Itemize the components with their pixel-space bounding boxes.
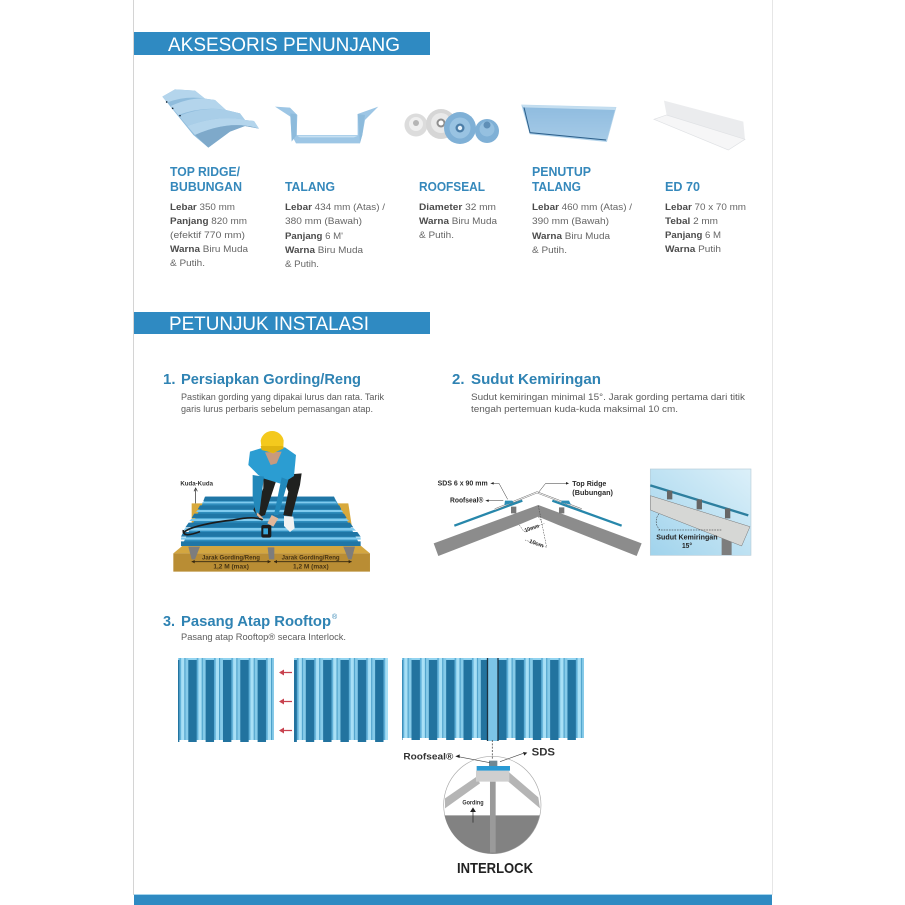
- label: jarak gording: Jarak Gording/Reng: [202, 555, 260, 562]
- roofseals and screws: [504, 501, 571, 513]
- specs: 380 mm (Bawah): [285, 216, 362, 227]
- specs: Warna Biru Muda: [285, 245, 364, 256]
- label: jarak gording: Jarak Gording/Reng: [282, 555, 340, 562]
- panel: accessory Penutup Talang: [522, 105, 632, 256]
- specs: & Putih.: [170, 258, 205, 269]
- post: [722, 532, 732, 555]
- specs: Lebar 350 mm: [170, 202, 235, 213]
- specs: Diameter 32 mm: [419, 202, 496, 213]
- labels: (Bubungan): [572, 490, 613, 497]
- specs: Warna Putih: [665, 244, 721, 255]
- wood frame: [173, 503, 370, 572]
- specs: [665, 202, 746, 255]
- leader lines: [455, 740, 527, 763]
- specs: & Putih.: [285, 259, 319, 270]
- label: 15°: [682, 542, 692, 550]
- specs: & Putih.: [419, 230, 454, 241]
- label: INTERLOCK: INTERLOCK: [457, 860, 533, 877]
- page edges: [133, 0, 773, 895]
- panel: accessory Talang: [275, 107, 385, 270]
- heading: [170, 164, 242, 194]
- angle: [656, 513, 722, 530]
- step 2 text: tengah pertemuan kuda-kuda maksimal 10 cm.: [471, 404, 678, 415]
- label: jarak gording: 1,2 M (max): [293, 564, 329, 571]
- label: Kuda-Kuda: Kuda-Kuda: [180, 481, 213, 488]
- panel: accessory ED 70: [654, 101, 746, 255]
- specs: Lebar 460 mm (Atas) /: [532, 202, 632, 213]
- specs: Warna Biru Muda: [419, 216, 498, 227]
- circle detail: [444, 756, 541, 854]
- specs: (efektif 770 mm): [170, 230, 245, 241]
- icon: roofseal: [404, 109, 499, 144]
- label: jarak gording: 1,2 M (max): [213, 564, 249, 571]
- specs: Warna Biru Muda: [170, 244, 249, 255]
- step 1 text: [163, 371, 384, 415]
- specs: Warna Biru Muda: [532, 231, 611, 242]
- specs: [285, 202, 385, 270]
- step 3 text: ®: [332, 613, 338, 621]
- step 1 text: garis lurus perbaris sebelum pemasangan atap.: [181, 404, 373, 415]
- section heading: Aksesoris Penunjang: AKSESORIS PENUNJANG: [168, 34, 400, 56]
- sheet: [650, 485, 748, 515]
- ridge cap: [495, 492, 582, 509]
- labels: 10cm: [528, 539, 544, 550]
- step 1 text: 1.: [163, 371, 176, 388]
- specs: 390 mm (Bawah): [532, 216, 609, 227]
- label: Kuda-Kuda: [180, 481, 213, 503]
- specs: Lebar 434 mm (Atas) /: [285, 202, 385, 213]
- heading: PENUTUP: [532, 164, 591, 179]
- icon: top ridge: [162, 89, 259, 148]
- dimension lines: [519, 506, 547, 547]
- heading: [532, 164, 591, 194]
- rafters: [434, 505, 642, 556]
- heading: ED 70: [665, 179, 700, 194]
- illustration: slope angle panel: [650, 469, 751, 555]
- specs: Panjang 6 M': [285, 231, 343, 242]
- illustration: interlock detail: SDS: [532, 747, 555, 759]
- specs: [419, 202, 498, 241]
- roof sheet A: [178, 658, 274, 742]
- specs: Panjang 6 M: [665, 230, 721, 241]
- icon: ED 70 angle: [654, 101, 745, 150]
- supports: [188, 547, 355, 559]
- specs: & Putih.: [532, 245, 567, 256]
- step 1 text: Persiapkan Gording/Reng: [181, 371, 361, 388]
- gording label: Gording: [462, 801, 484, 807]
- section heading: Petunjuk Instalasi: [134, 312, 430, 335]
- roof sheets: [454, 501, 622, 526]
- roof sheet C: interlocked: [402, 658, 584, 741]
- specs: Panjang 820 mm: [170, 216, 247, 227]
- heading: TALANG: [285, 179, 335, 194]
- labels: 10mm: [524, 524, 540, 534]
- interlock arrows: [279, 670, 292, 734]
- labels: [438, 480, 613, 550]
- labels: Roofseal®: [403, 751, 453, 761]
- specs: Lebar 70 x 70 mm: [665, 202, 746, 213]
- gording label: [462, 801, 484, 823]
- illustration: interlock detail: [403, 740, 555, 854]
- step 2 text: Sudut Kemiringan: [471, 371, 601, 388]
- roof sheets: [181, 497, 361, 546]
- illustration: ridge cross-section: [434, 480, 642, 556]
- step 3 text: [163, 613, 346, 643]
- panel: accessory Roofseal: [404, 109, 499, 241]
- labels: SDS 6 x 90 mm: [438, 480, 488, 487]
- icon: penutup talang: [522, 105, 616, 142]
- labels: Roofseal®: [450, 497, 484, 505]
- step 3 text: Pasang Atap Rooftop: [181, 613, 331, 630]
- beam: [650, 496, 750, 546]
- step 3 text: Pasang atap Rooftop® secara Interlock.: [181, 632, 346, 643]
- section heading: Petunjuk Instalasi: PETUNJUK INSTALASI: [169, 313, 369, 335]
- illustration: worker on roof: [173, 431, 370, 572]
- footer bar: [134, 894, 772, 905]
- labels: Top Ridge: [572, 481, 606, 488]
- heading: TALANG: [532, 179, 581, 194]
- panel: accessory Top Ridge: [162, 89, 259, 269]
- step 2 text: [452, 371, 745, 415]
- worker: [183, 431, 302, 538]
- specs: [532, 202, 632, 256]
- icon: talang: [275, 107, 378, 143]
- step 3 text: 3.: [163, 613, 175, 630]
- heading: BUBUNGAN: [170, 179, 242, 194]
- label: Sudut Kemiringan: [656, 534, 718, 541]
- heading: TOP RIDGE/: [170, 164, 240, 179]
- heading: ROOFSEAL: [419, 179, 485, 194]
- step 1 text: Pastikan gording yang dipakai lurus dan rata. Tarik: [181, 392, 384, 403]
- specs: [170, 202, 249, 269]
- step 2 text: Sudut kemiringan minimal 15°. Jarak gording pertama dari titik: [471, 392, 745, 403]
- roof sheet B: [294, 658, 388, 742]
- specs: Tebal 2 mm: [665, 216, 718, 227]
- label: [656, 534, 718, 550]
- step 2 text: 2.: [452, 371, 465, 388]
- label: jarak gording: [192, 555, 352, 571]
